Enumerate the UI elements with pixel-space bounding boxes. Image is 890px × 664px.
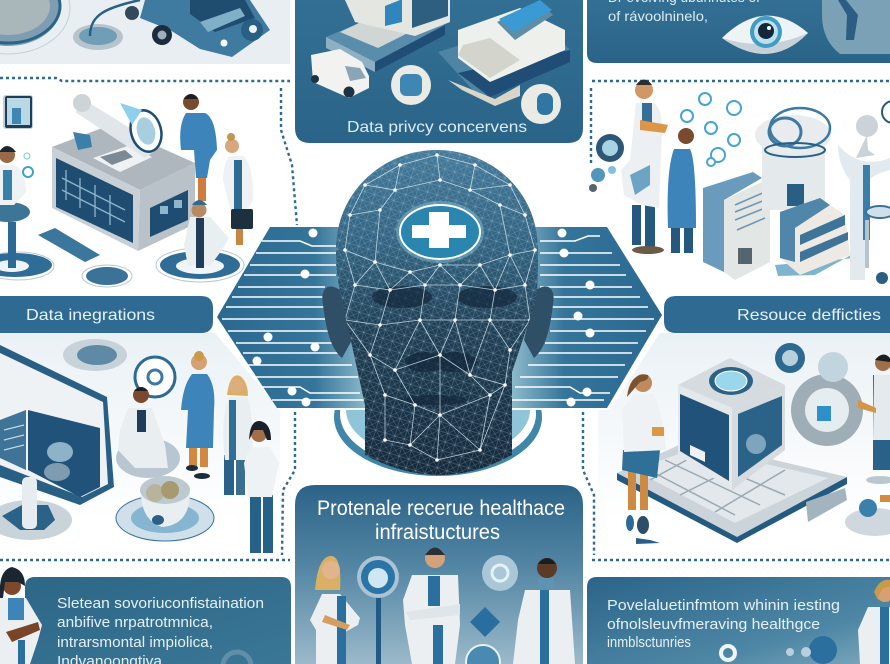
- circuit traces: [222, 236, 654, 400]
- figure: blonde doctor: [223, 375, 252, 495]
- icon: cylinder with stethoscope: [755, 108, 831, 210]
- figure: woman at terminal: [622, 374, 666, 544]
- left ear: [322, 286, 352, 358]
- panel: lower scene tint: [0, 333, 280, 552]
- icon: gray floor plate: [63, 339, 127, 371]
- panel: monitoring callout: [587, 0, 890, 63]
- face shadows: [372, 286, 517, 405]
- heading: healthcare infrastructures: infraistuctures: [375, 521, 500, 544]
- figure: seated doctor: [116, 387, 180, 478]
- icon: keyboard: [38, 228, 100, 262]
- icon: book stack: [775, 198, 860, 276]
- icon: data cube: [678, 358, 785, 490]
- icon: right building: [438, 0, 570, 106]
- face network: [330, 145, 545, 480]
- icon: bottom circle badge: [466, 645, 500, 664]
- figure: blonde doctor: [310, 556, 360, 664]
- dotted connectors: [0, 78, 890, 560]
- icon: medical cross: [396, 201, 484, 263]
- scene: data integrations: [0, 94, 253, 287]
- figure: central doctor: [403, 548, 460, 664]
- scene: lower right terminal: [617, 343, 890, 544]
- icon: concentric rings: [0, 0, 70, 54]
- circuit nodes: [252, 228, 594, 406]
- panel: healthcare infrastructures: [295, 485, 583, 664]
- icon: bowl: [116, 476, 214, 541]
- banner: data integrations: [0, 296, 213, 333]
- figure: patient in gown: [181, 351, 214, 479]
- text: body copy: [57, 595, 264, 664]
- icon: base pad with cable: [73, 0, 140, 50]
- figure: clinician: [858, 580, 890, 664]
- text: body copy: Sletean sovoriuconfistaination: [57, 595, 264, 612]
- icon: central AI head: [322, 145, 554, 480]
- figure: clinician with bag: [223, 133, 253, 245]
- text: monitoring copy: of rávoolninelo,: [608, 8, 708, 24]
- text: body copy: ofnolsleuvfmeraving healthgce: [607, 616, 820, 633]
- heading: data privacy: Data privcy concervens: [347, 119, 527, 136]
- icon: tablet: [3, 95, 33, 129]
- icon: small gear tray: [845, 495, 890, 536]
- figure: clinician: [0, 567, 42, 664]
- scene: lower left care team: [0, 339, 279, 553]
- figure: standing doctor: [621, 80, 668, 254]
- icon: gear badge: [721, 646, 735, 660]
- icon: open monitor: [0, 345, 114, 505]
- icon: light circle badge: [482, 555, 518, 591]
- figure: patient in blue gown: [180, 94, 217, 201]
- icon: dome: [822, 0, 890, 54]
- icon: eye: [722, 16, 808, 54]
- panel: data privacy concerns: [295, 0, 583, 143]
- icon: folder stack: [703, 172, 770, 280]
- text: body copy: intrarsmontal impiolica,: [57, 634, 213, 651]
- text: body copy: inmblsctunries: [607, 634, 691, 651]
- panel: lower right scene tint: [598, 333, 890, 552]
- text: monitoring copy: [608, 0, 760, 24]
- icon: data cell circle: [135, 357, 175, 397]
- icon: mannequin stand: [838, 101, 890, 284]
- icon: dome emblem: [786, 636, 837, 664]
- icon: gear: [223, 652, 251, 664]
- icon: stethoscope emblem: [357, 556, 399, 664]
- icon: imaging console: [52, 94, 195, 251]
- right ear: [524, 286, 554, 358]
- network nodes: [343, 153, 537, 462]
- figure: right doctor: [513, 558, 575, 664]
- icon: left building: [326, 0, 450, 72]
- label: Data inegrations: [26, 307, 155, 324]
- figure: doctor in front: [244, 421, 279, 553]
- heading: healthcare infrastructures: [317, 497, 565, 544]
- figure: seated clinician on ring: [156, 200, 244, 282]
- figure: man at right edge: [858, 354, 890, 484]
- label: Resouce defficties: [737, 307, 881, 324]
- icon: badge left: [391, 65, 431, 105]
- figure: patient from behind: [668, 128, 696, 253]
- icon: keyboard platform: [617, 440, 847, 543]
- banner: resource deficiencies: [664, 296, 890, 333]
- scene: resource deficiencies: [589, 80, 890, 284]
- panel: medical device scene: [0, 0, 290, 64]
- icon: gears: [775, 343, 863, 446]
- icon: van: [311, 49, 369, 98]
- icon: badge right: [521, 84, 561, 124]
- network lines: [345, 155, 535, 460]
- icon: connected nodes: [681, 93, 741, 166]
- panel: evaluation copy lower right: [587, 577, 890, 664]
- icon: diagnostic machine: [125, 0, 270, 57]
- figure: left clinician and stand: [0, 146, 54, 280]
- icon: diamond badge: [470, 607, 500, 637]
- text: body copy: Povelaluetinfmtom whinin iesting: [607, 597, 840, 614]
- text: body copy: [607, 597, 840, 651]
- chart: circuit band: [217, 227, 662, 408]
- icon: floor stand: [0, 477, 72, 540]
- icon: small floor badge: [82, 265, 132, 287]
- heading: healthcare infrastructures: Protenale recerue healthace: [317, 497, 565, 520]
- text: body copy: anbifive nrpatrotmnica,: [57, 614, 213, 631]
- pedestal ring: [334, 410, 542, 476]
- panel: skeleton copy lower left: [0, 567, 291, 664]
- icon: gears left: [589, 134, 624, 192]
- head silhouette: [336, 150, 538, 475]
